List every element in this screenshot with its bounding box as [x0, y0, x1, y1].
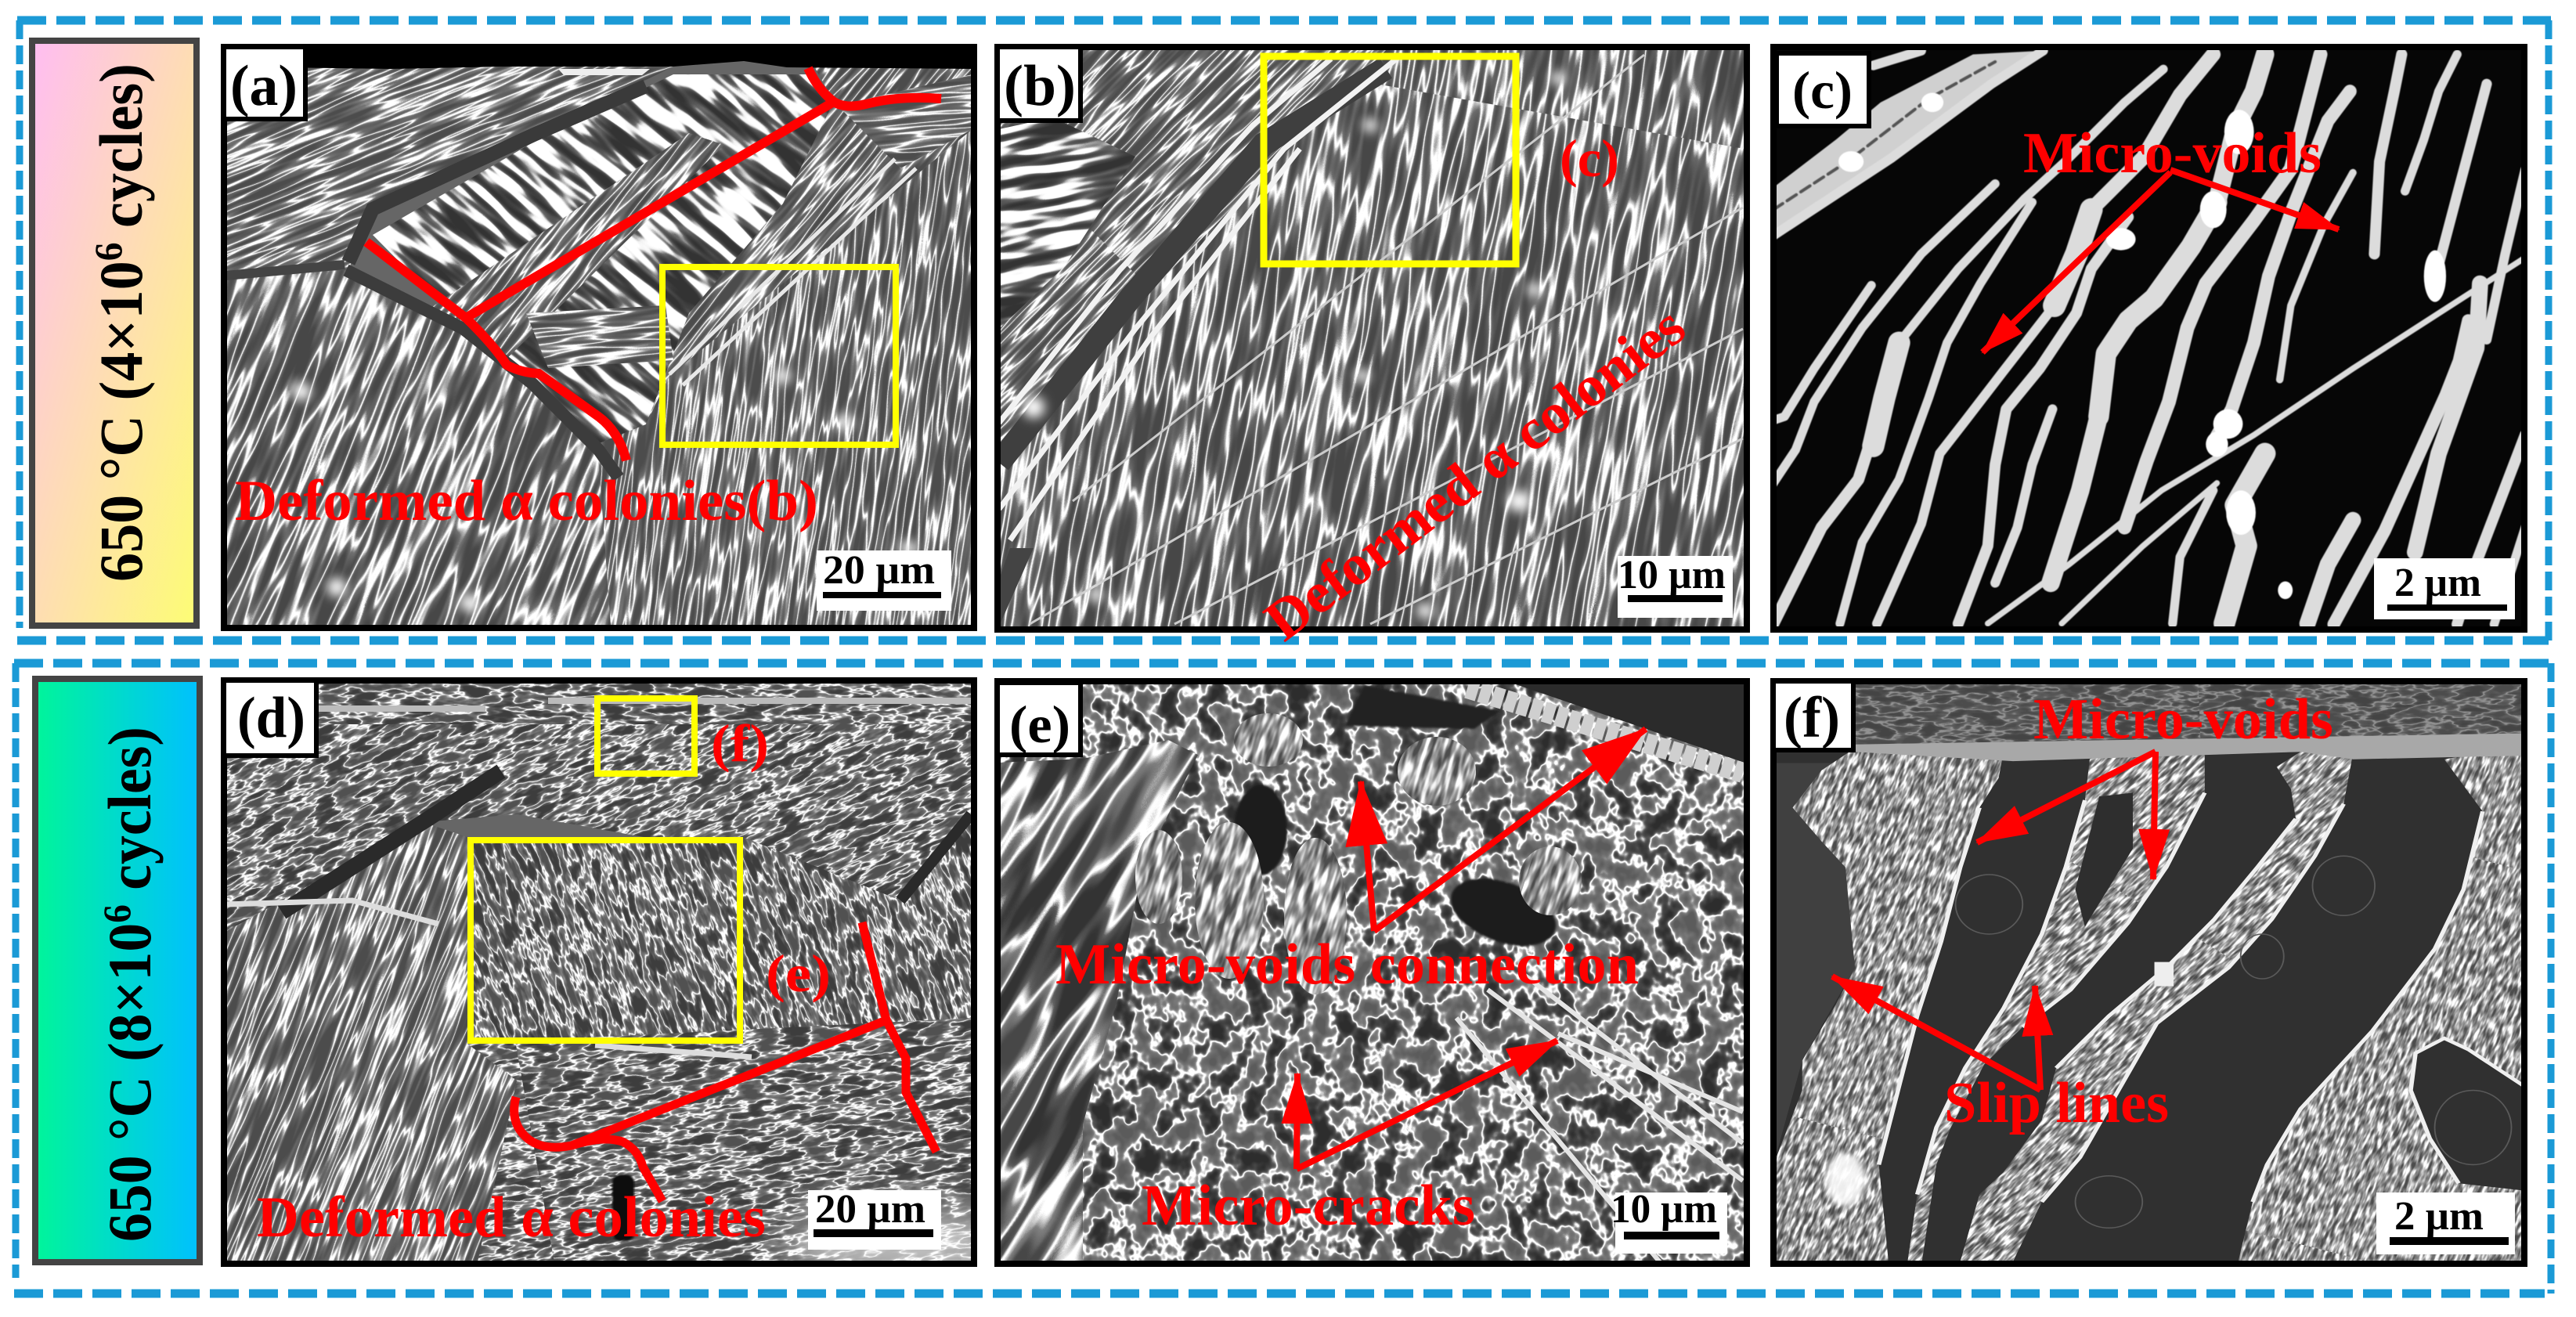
panel a: deformed alpha colonies micrograph	[224, 47, 974, 628]
panel letter f: (f)	[1784, 686, 1840, 750]
panel letter c	[1777, 53, 1869, 126]
yellow box a	[662, 267, 896, 445]
panel letter e: (e)	[1009, 695, 1070, 754]
scale bar a	[817, 548, 951, 611]
scale bar d	[808, 1187, 941, 1250]
panel d: deformed alpha colonies micrograph	[224, 680, 1018, 1284]
micro-voids arrows f	[1977, 752, 2156, 879]
panel b: deformed alpha colonies micrograph	[998, 47, 1747, 654]
panel e: micro-voids connection and micro-cracks micrograph	[998, 681, 1747, 1264]
yellow box b	[1264, 56, 1516, 264]
panel c: micro-voids micrograph	[1773, 47, 2525, 630]
red grain outline a	[366, 68, 941, 460]
row label: 650 °C 8×10⁶ cycles: cycles)	[96, 727, 164, 904]
scale bar e: 10 µm	[1611, 1187, 1717, 1232]
annotation a: Deformed α colonies(b)	[235, 469, 818, 533]
panel letter d: (d)	[237, 686, 305, 750]
micrograph f texture	[1773, 681, 2525, 1264]
yellow box e region	[471, 840, 740, 1041]
row label: 650 °C 4×10⁶ cycles: cycles)	[87, 63, 155, 243]
panel a frame	[224, 47, 974, 628]
panel e frame	[998, 681, 1747, 1264]
micrograph a texture	[224, 47, 974, 628]
callout e: (e)	[766, 944, 831, 1003]
slip lines arrows	[1832, 976, 2040, 1090]
yellow box f region	[597, 698, 695, 774]
panel letter d	[224, 680, 316, 756]
micrograph c lamellae	[1773, 47, 2525, 630]
panel letter a: (a)	[230, 54, 298, 118]
micrograph b texture	[998, 47, 1747, 630]
scale bar b: 10 µm	[1618, 553, 1726, 597]
annotation slip lines: Slip lines	[1944, 1071, 2169, 1135]
scale bar c	[2374, 558, 2515, 619]
annotation micro-voids connection: Micro-voids connection	[1055, 933, 1639, 997]
panel b frame	[998, 47, 1747, 630]
annotation micro-voids f: Micro-voids	[2033, 687, 2333, 752]
red grain outline d	[514, 922, 936, 1201]
panel letter c: (c)	[1792, 60, 1853, 120]
micro-cracks arrows	[1297, 1041, 1557, 1169]
panel letter f	[1773, 681, 1853, 750]
panel letter b: (b)	[1004, 54, 1076, 118]
row label: 650 °C 8×10⁶ cycles: 650 °C (8×10	[96, 904, 164, 1242]
panel c frame	[1773, 47, 2524, 630]
annotation micro-cracks: Micro-cracks	[1142, 1174, 1475, 1238]
scale bar b	[1618, 553, 1733, 618]
micrograph e texture	[998, 681, 1747, 1264]
scale bar f: 2 µm	[2394, 1194, 2484, 1239]
callout c: (c)	[1560, 128, 1619, 188]
panel f: micro-voids and slip lines micrograph	[1773, 681, 2525, 1264]
annotation d: Deformed α colonies	[257, 1185, 766, 1250]
scale bar a: 20 µm	[823, 548, 935, 593]
row label: 650 °C 4×10⁶ cycles: 6	[86, 243, 130, 261]
scale bar e	[1611, 1187, 1727, 1254]
rotated annotation b: Deformed α colonies	[1254, 294, 1697, 654]
micro-voids connection arrows	[1361, 729, 1646, 931]
row label: 650 °C 4×10⁶ cycles	[32, 41, 197, 626]
scale bar c: 2 µm	[2394, 561, 2481, 605]
panel f frame	[1773, 681, 2524, 1264]
panel letter e	[998, 683, 1081, 755]
row label: 650 °C 8×10⁶ cycles	[35, 679, 200, 1262]
bottom row dashed frame	[14, 663, 2551, 1294]
scale bar d: 20 µm	[815, 1187, 925, 1232]
annotation c: Micro-voids	[2023, 121, 2322, 186]
row label: 650 °C 8×10⁶ cycles: 6	[95, 904, 139, 923]
callout f: (f)	[711, 713, 769, 773]
micrograph d texture	[227, 684, 971, 1261]
top row dashed frame	[17, 20, 2551, 640]
micro-voids arrows c	[1983, 170, 2339, 352]
scale bar f	[2376, 1193, 2515, 1254]
panel d frame	[224, 680, 974, 1264]
row label: 650 °C 4×10⁶ cycles: 650 °C (4×10	[87, 244, 155, 582]
